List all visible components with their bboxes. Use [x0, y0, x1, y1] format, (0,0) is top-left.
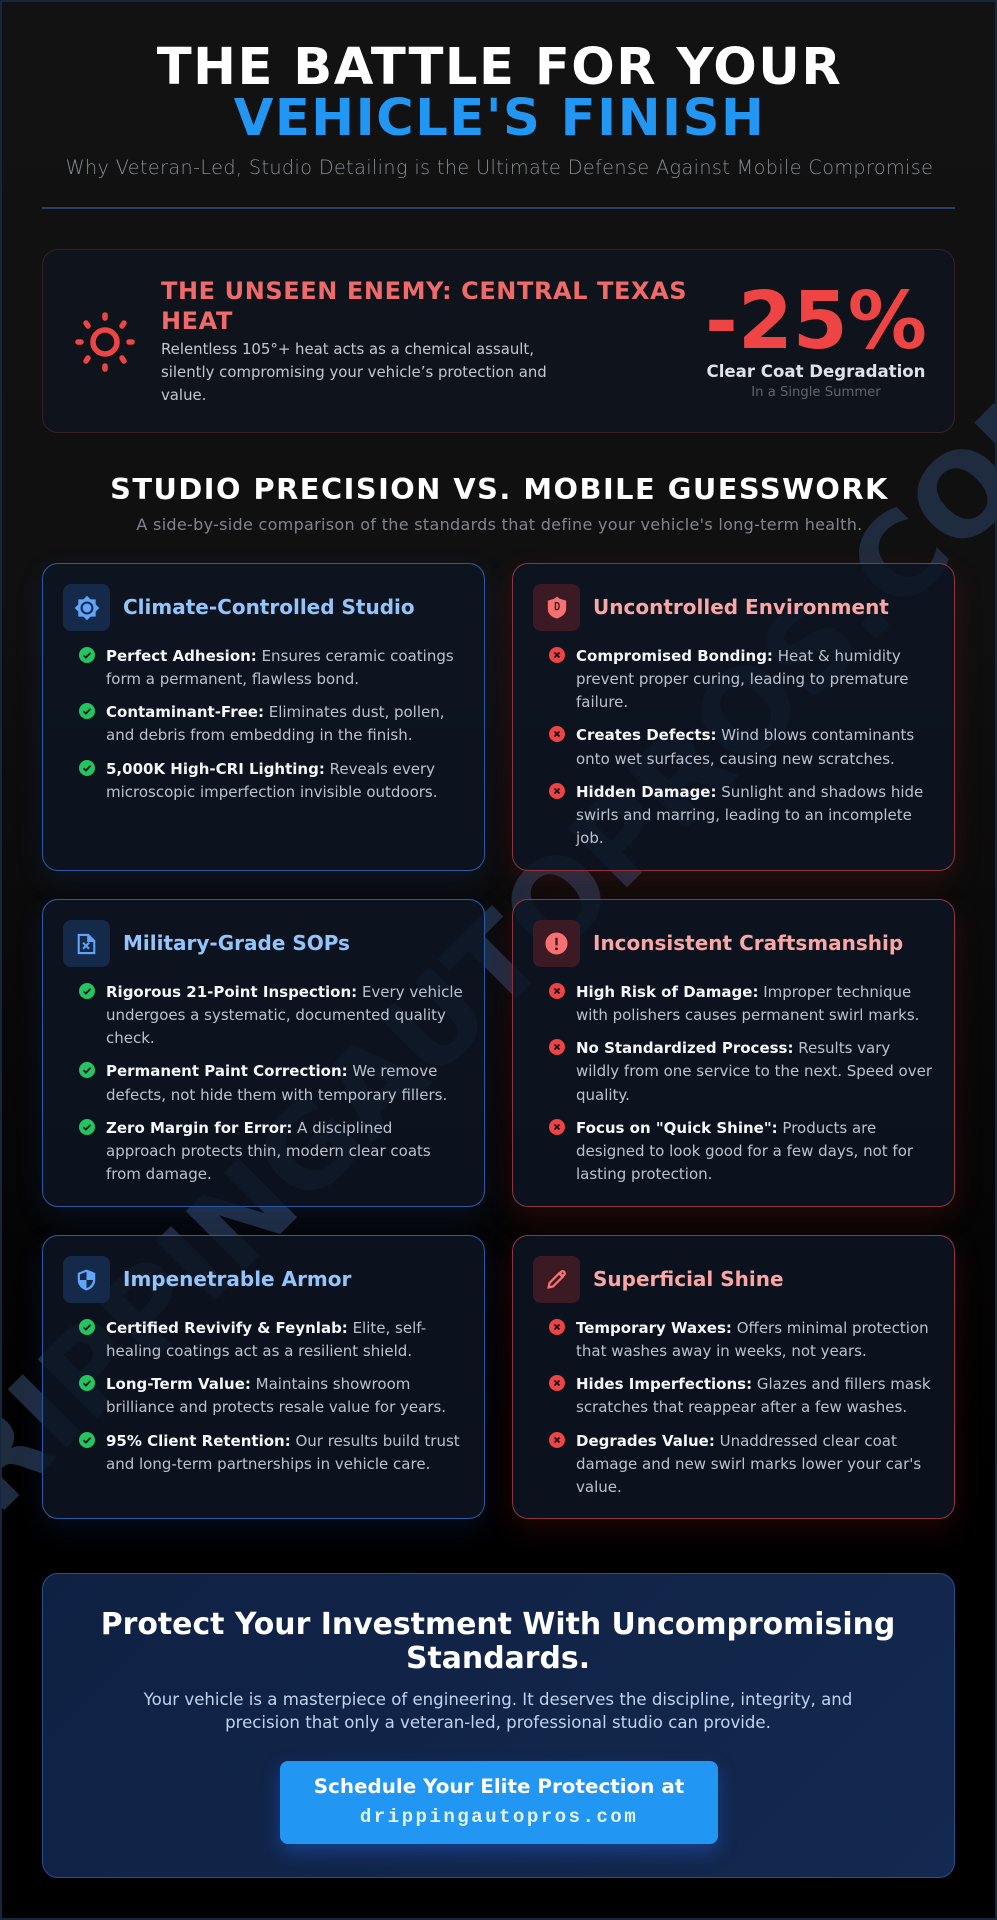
drawbacks list: designed to look good for a few days, not for [576, 1142, 913, 1160]
drawbacks list: wildly from one service to the next. Speed over [576, 1062, 932, 1080]
drawbacks list: prevent proper curing, leading to premature [576, 670, 908, 688]
panel: uncontrolled environment [512, 563, 955, 871]
drawbacks list [549, 983, 932, 1183]
benefits list [79, 983, 463, 1183]
drawbacks list: Focus on "Quick Shine": Products are [576, 1119, 876, 1137]
card title: Military-Grade SOPs [123, 931, 350, 955]
icon: sun [75, 312, 135, 372]
button url: drippingautopros.com [360, 1806, 638, 1828]
icon: damaged shield [533, 584, 580, 631]
title: VEHICLE'S FINISH [234, 88, 765, 148]
cta text: Your vehicle is a masterpiece of engineering. It deserves the discipline, integrity, and [144, 1690, 852, 1709]
benefits list: 95% Client Retention: Our results build trust [106, 1432, 460, 1450]
icon: shield [63, 1256, 110, 1303]
benefits list: Certified Revivify & Feynlab: Elite, self- [106, 1319, 426, 1337]
drawbacks list [549, 647, 923, 847]
drawbacks list: Hidden Damage: Sunlight and shadows hide [576, 783, 923, 801]
drawbacks list: job. [576, 829, 604, 847]
card title: Superficial Shine [593, 1267, 784, 1291]
icon: alert [533, 920, 580, 967]
card title: Climate-Controlled Studio [123, 595, 415, 619]
panel: inconsistent craftsmanship [512, 899, 955, 1207]
drawbacks list: that washes away in weeks, not years. [576, 1342, 867, 1360]
icon: brightness [63, 584, 110, 631]
benefits list: microscopic imperfection invisible outdoors. [106, 783, 438, 801]
stat note: In a Single Summer [751, 385, 881, 400]
drawbacks list: Creates Defects: Wind blows contaminants [576, 726, 914, 744]
section heading: STUDIO PRECISION VS. MOBILE GUESSWORK [110, 472, 889, 506]
title [157, 37, 842, 148]
description [161, 340, 547, 404]
card title: Inconsistent Craftsmanship [593, 931, 903, 955]
drawbacks list: with polishers causes permanent swirl marks. [576, 1006, 919, 1024]
benefits list: brilliance and protects resale value for years. [106, 1398, 446, 1416]
benefits list: undergoes a systematic, documented quality [106, 1006, 446, 1024]
cta heading: Standards. [406, 1641, 590, 1676]
drawbacks list: swirls and marring, leading to an incomplete [576, 806, 912, 824]
description: Relentless 105°+ heat acts as a chemical assault, [161, 340, 534, 358]
benefits list: Zero Margin for Error: A disciplined [106, 1119, 392, 1137]
benefits list [79, 647, 454, 801]
cta text: precision that only a veteran-led, professional studio can provide. [225, 1713, 771, 1732]
benefits list [79, 1319, 460, 1473]
drawbacks list: No Standardized Process: Results vary [576, 1039, 890, 1057]
divider [42, 207, 955, 208]
description: silently compromising your vehicle’s protection and [161, 363, 547, 381]
title: THE BATTLE FOR YOUR [157, 37, 842, 97]
drawbacks list: failure. [576, 693, 628, 711]
benefits list: defects, not hide them with temporary fillers. [106, 1086, 447, 1104]
cta heading [101, 1607, 895, 1676]
drawbacks list [549, 1319, 931, 1496]
panel: central texas heat [42, 249, 955, 433]
benefits list: and debris from embedding in the finish. [106, 726, 412, 744]
stat label: Clear Coat Degradation [707, 362, 925, 381]
drawbacks list: Compromised Bonding: Heat & humidity [576, 647, 901, 665]
drawbacks list: value. [576, 1478, 622, 1496]
benefits list: approach protects thin, modern clear coats [106, 1142, 431, 1160]
stat number: -25% [705, 275, 927, 367]
benefits list: healing coatings act as a resilient shield. [106, 1342, 412, 1360]
drawbacks list: quality. [576, 1086, 630, 1104]
benefits list: 5,000K High-CRI Lighting: Reveals every [106, 760, 435, 778]
drawbacks list: High Risk of Damage: Improper technique [576, 983, 911, 1001]
benefits list: Rigorous 21-Point Inspection: Every vehicle [106, 983, 463, 1001]
panel: impenetrable armor [42, 1235, 485, 1519]
benefits list: form a permanent, flawless bond. [106, 670, 359, 688]
cta button [280, 1761, 718, 1844]
card title: Impenetrable Armor [123, 1267, 351, 1291]
section subtitle: A side-by-side comparison of the standards that define your vehicle's long-term health. [136, 515, 863, 534]
benefits list: Contaminant-Free: Eliminates dust, pollen, [106, 703, 445, 721]
drawbacks list: onto wet surfaces, causing new scratches. [576, 750, 895, 768]
benefits list: from damage. [106, 1165, 212, 1183]
drawbacks list: scratches that reappear after a few washes. [576, 1398, 907, 1416]
drawbacks list: damage and new swirl marks lower your car's [576, 1455, 921, 1473]
panel: military-grade sops [42, 899, 485, 1207]
button label: Schedule Your Elite Protection at [314, 1775, 684, 1798]
stat: -25% [705, 275, 927, 400]
description: value. [161, 386, 206, 404]
panel: call to action [42, 1573, 955, 1878]
subtitle: Why Veteran-Led, Studio Detailing is the Ultimate Defense Against Mobile Compromise [66, 156, 933, 179]
cta text [144, 1690, 852, 1732]
benefits list: Permanent Paint Correction: We remove [106, 1062, 437, 1080]
panel: climate-controlled studio [42, 563, 485, 871]
drawbacks list: Degrades Value: Unaddressed clear coat [576, 1432, 897, 1450]
benefits list: check. [106, 1029, 155, 1047]
icon: document [63, 920, 110, 967]
benefits list: Perfect Adhesion: Ensures ceramic coatings [106, 647, 454, 665]
benefits list: Long-Term Value: Maintains showroom [106, 1375, 410, 1393]
icon: pencil [533, 1256, 580, 1303]
heading: the unseen enemy: THE UNSEEN ENEMY: CENTRAL TEXAS HEAT [161, 277, 687, 335]
drawbacks list: Hides Imperfections: Glazes and fillers mask [576, 1375, 931, 1393]
card title: Uncontrolled Environment [593, 595, 889, 619]
cta heading: Protect Your Investment With Uncompromising [101, 1607, 895, 1642]
benefits list: and long-term partnerships in vehicle care. [106, 1455, 430, 1473]
panel: superficial shine [512, 1235, 955, 1519]
drawbacks list: Temporary Waxes: Offers minimal protection [576, 1319, 929, 1337]
drawbacks list: lasting protection. [576, 1165, 712, 1183]
